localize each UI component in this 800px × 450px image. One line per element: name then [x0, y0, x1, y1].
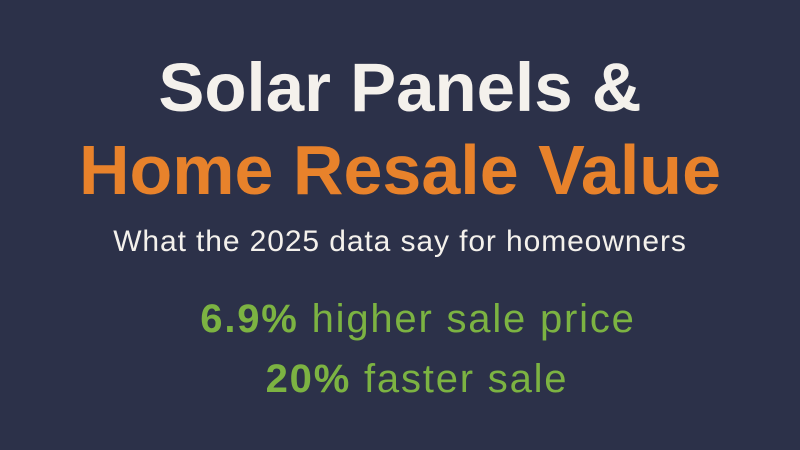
title line 1: Solar Panels & — [158, 49, 642, 126]
title line 2: Home Resale Value — [79, 131, 721, 209]
stat: faster sale: 20% faster sale — [266, 357, 568, 401]
stat: higher sale price: 6.9% higher sale price — [200, 297, 636, 341]
subtitle: What the 2025 data say for homeowners — [113, 225, 687, 258]
